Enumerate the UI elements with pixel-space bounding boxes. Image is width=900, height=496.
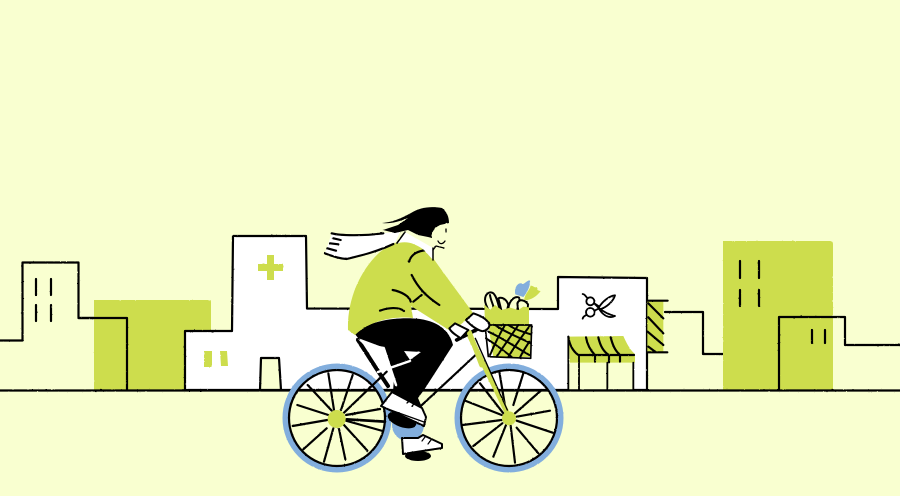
shop: hair salon front xyxy=(568,294,635,389)
sign: striped hanging sign xyxy=(647,300,668,353)
shirt tail patch xyxy=(358,339,385,349)
far shoe xyxy=(402,435,442,461)
line: tower overlap on green block xyxy=(78,318,127,390)
jacket fold lines xyxy=(380,250,439,311)
hair xyxy=(382,207,449,238)
near shoe xyxy=(381,392,426,426)
windows: hospital xyxy=(204,351,228,367)
line: low building right of shop xyxy=(665,312,724,354)
leaves xyxy=(515,280,530,297)
bread xyxy=(485,292,528,312)
bicycle xyxy=(286,337,560,469)
building: left green block xyxy=(94,300,211,390)
icon: hospital cross xyxy=(258,255,283,280)
bike frame xyxy=(344,354,477,413)
bag xyxy=(484,304,529,326)
jacket xyxy=(348,242,473,335)
building: white hospital and street backdrop xyxy=(185,236,647,390)
saddle and seat post xyxy=(378,349,421,385)
cyclist xyxy=(325,207,541,461)
face xyxy=(431,222,449,250)
far leg line xyxy=(358,340,388,386)
rear wheel xyxy=(286,367,388,469)
scarf tail xyxy=(325,232,400,259)
building: left outlined tower xyxy=(0,262,127,390)
scene xyxy=(0,207,900,469)
icon: scissors xyxy=(583,294,615,319)
basket grid xyxy=(488,325,531,357)
scarf at neck xyxy=(396,232,433,260)
building: right green tower xyxy=(723,241,833,390)
basket with groceries xyxy=(484,280,541,358)
door: hospital xyxy=(260,358,281,390)
awning xyxy=(568,336,635,363)
chainring xyxy=(392,409,424,441)
front wheel xyxy=(458,367,560,469)
fork xyxy=(470,337,516,425)
ground line xyxy=(0,389,900,392)
handlebar and hands xyxy=(449,313,489,365)
near pedal xyxy=(386,408,418,432)
pants xyxy=(355,318,453,412)
building: right small outlined xyxy=(779,317,900,390)
